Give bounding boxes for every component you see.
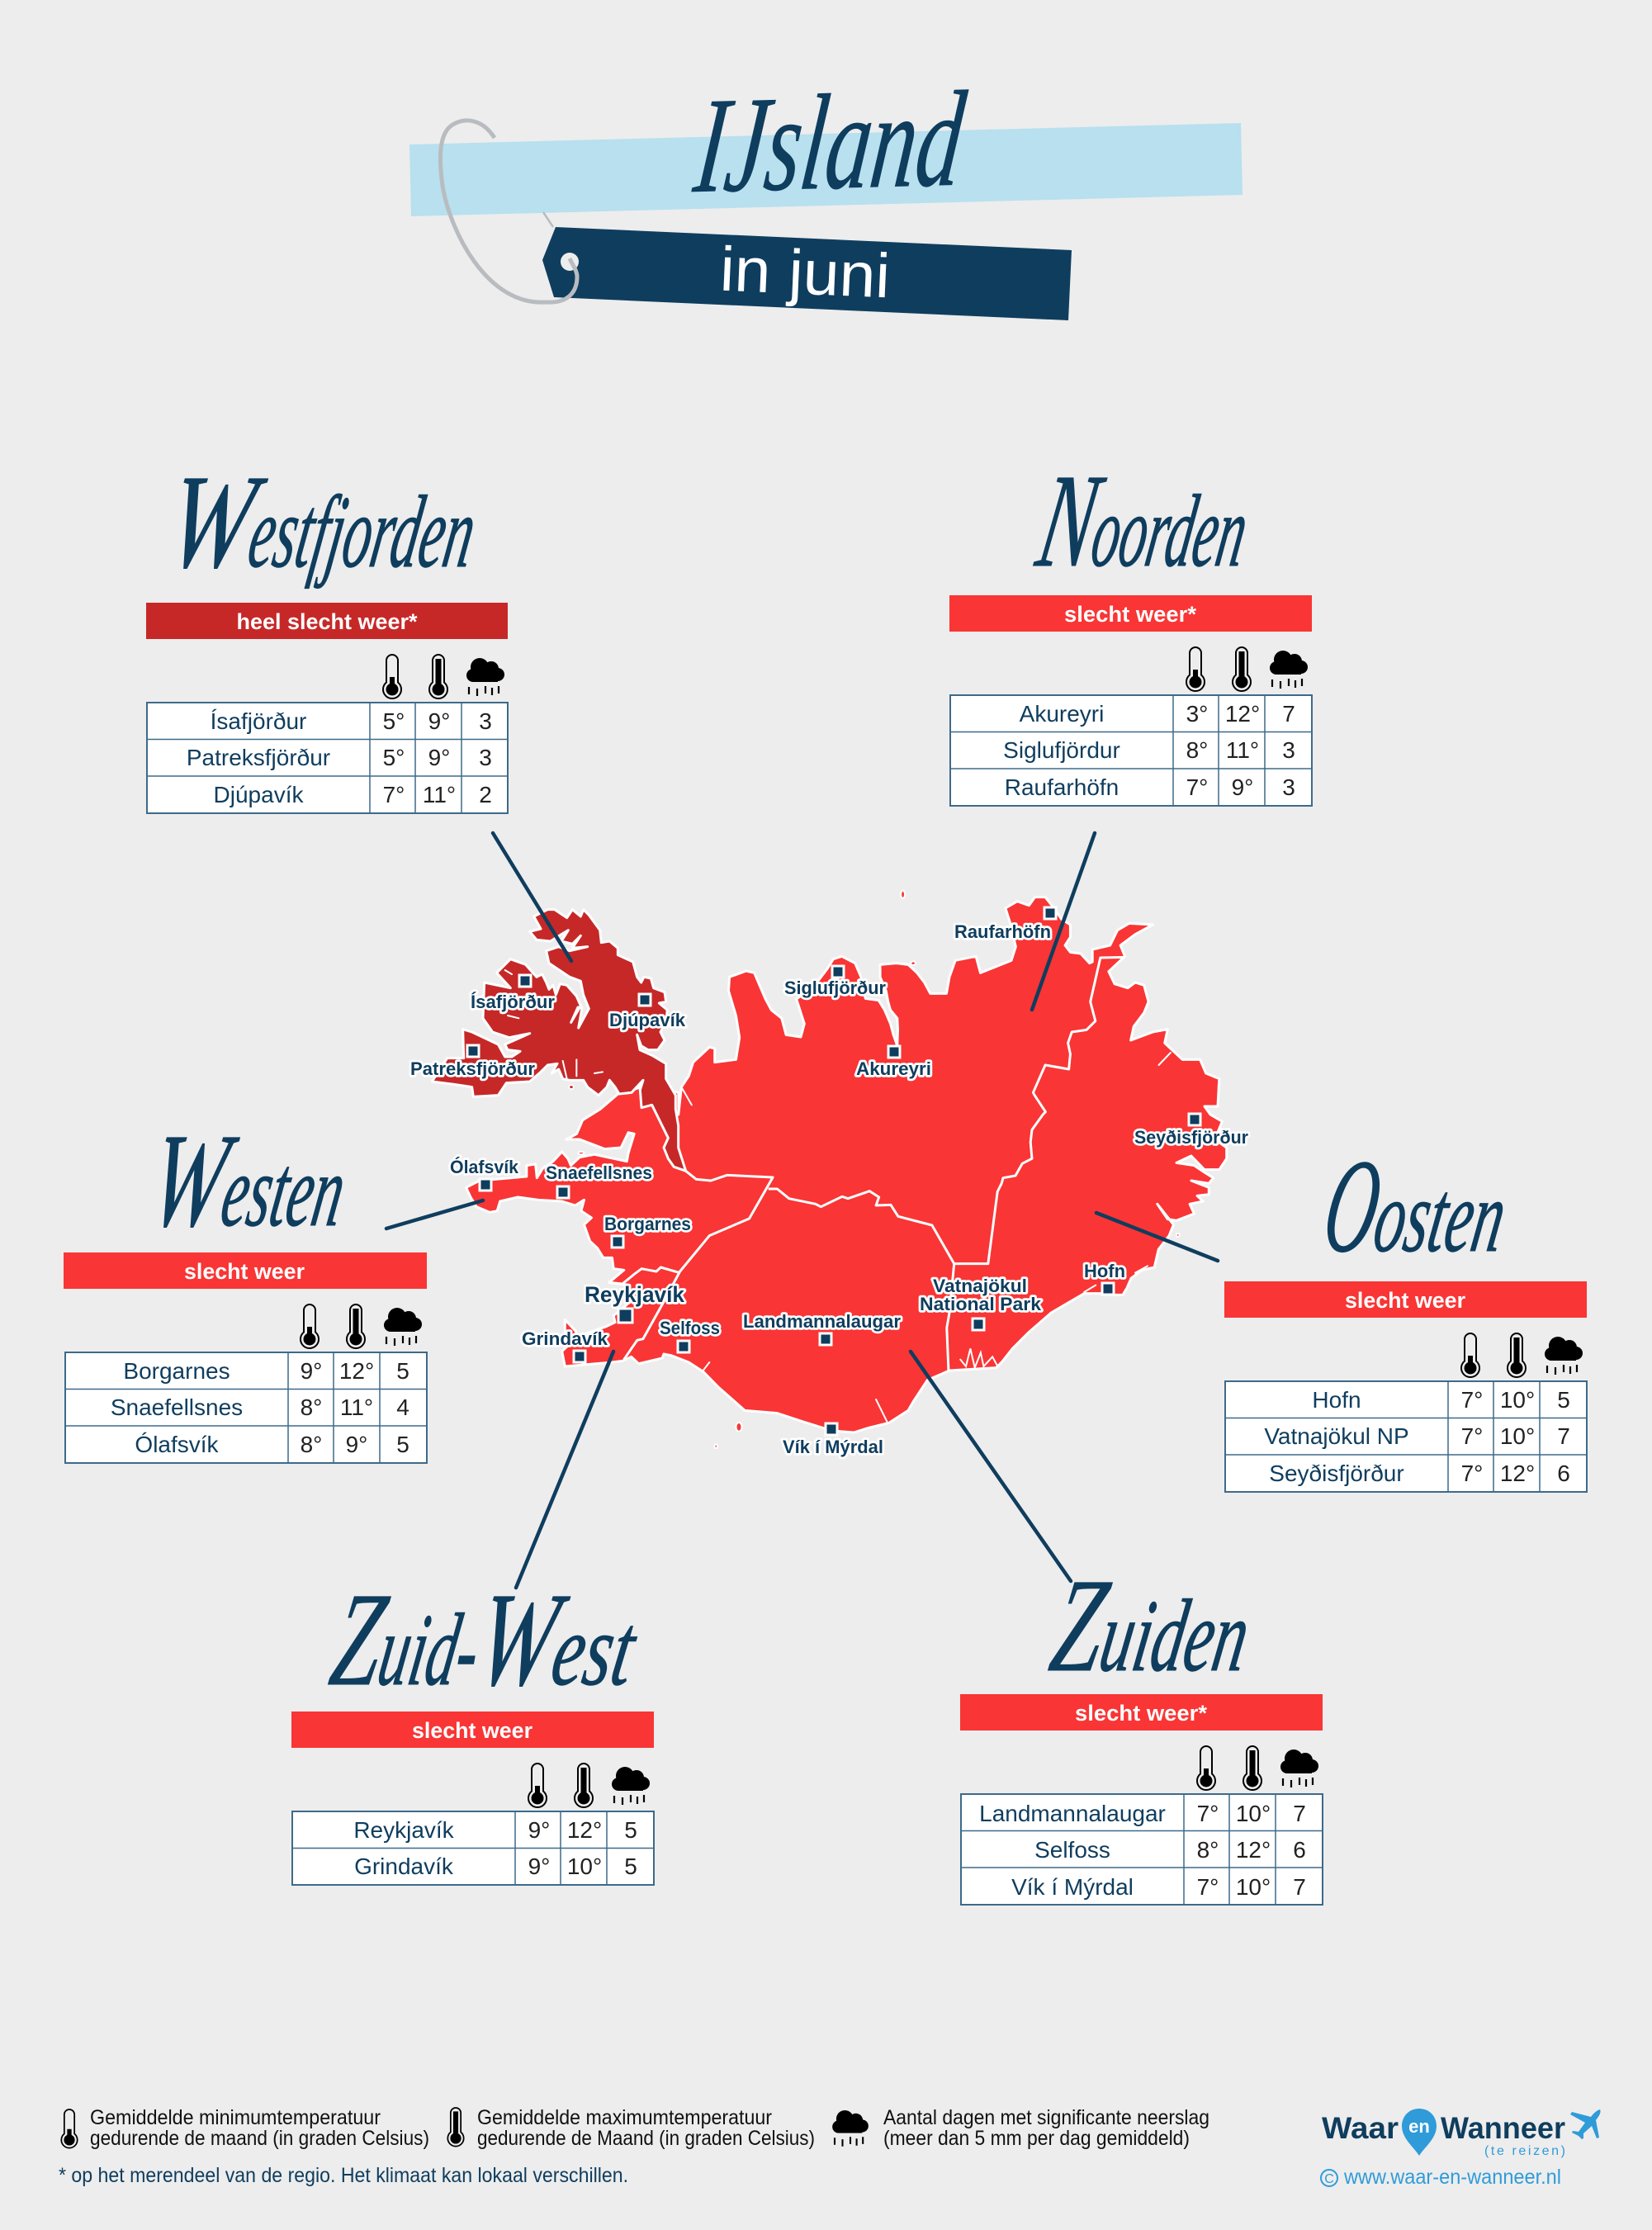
city labels: Hofn — [1084, 1261, 1125, 1281]
legend text: min temperature: gedurende de maand (in graden Celsius) — [90, 2127, 429, 2150]
city labels: Djúpavík — [609, 1010, 686, 1030]
icon: rain — [1270, 651, 1308, 689]
panel body — [64, 1252, 427, 1463]
table: 8° — [301, 1432, 322, 1457]
rating bar — [1224, 1281, 1587, 1318]
panel: Westfjorden — [146, 448, 508, 813]
table: 6 — [1557, 1461, 1570, 1486]
table — [147, 703, 508, 813]
city labels: Vík í Mýrdal — [783, 1437, 883, 1457]
icon: legend max temperature — [447, 2108, 464, 2147]
city labels — [410, 921, 1248, 1457]
icon: min temperature — [301, 1304, 319, 1348]
connector: Zuid-West — [516, 1352, 613, 1588]
panel body: heel slecht weer* — [236, 609, 418, 634]
city labels: Ísafjörður — [471, 992, 555, 1012]
icon: max temperature — [1233, 647, 1251, 691]
heading: Westen — [140, 1107, 358, 1255]
panel body — [949, 595, 1312, 806]
footnote: * op het merendeel van de regio. Het klimaat kan lokaal verschillen. — [59, 2164, 628, 2187]
table: Patreksfjörður — [187, 745, 330, 770]
table: Ísafjörður — [211, 708, 306, 734]
landmass — [466, 897, 1227, 1432]
icon: plane — [1570, 2109, 1601, 2139]
table: 11° — [1226, 737, 1259, 763]
table: 3 — [479, 745, 492, 770]
icon: max temperature — [1508, 1333, 1526, 1377]
table: 7° — [1197, 1874, 1219, 1900]
icon: rain — [466, 658, 504, 696]
icon: max temperature — [347, 1304, 365, 1348]
legend text: max temperature: gedurende de Maand (in graden Celsius) — [477, 2127, 815, 2150]
table: 8° — [1197, 1837, 1219, 1863]
panel: Oosten — [1224, 1133, 1587, 1492]
subtitle: in juni: in juni — [718, 234, 892, 311]
panel body: slecht weer — [412, 1718, 533, 1743]
rating bar — [64, 1252, 427, 1289]
table: 9° — [428, 745, 450, 770]
table: 5 — [396, 1432, 409, 1457]
city labels: Snaefellsnes — [546, 1162, 652, 1183]
table: 10° — [1500, 1387, 1535, 1413]
table: 9° — [528, 1817, 550, 1843]
table: 3 — [1282, 737, 1295, 763]
panel body: slecht weer* — [1075, 1701, 1207, 1726]
icon: min temperature — [528, 1764, 547, 1807]
panel: Zuiden — [960, 1552, 1323, 1905]
table — [950, 695, 1312, 806]
connector: Noorden — [1032, 833, 1095, 1010]
legend text: min temperature: Gemiddelde minimumtemperatuur — [90, 2106, 381, 2129]
rating bar — [146, 603, 508, 639]
table: 9° — [1232, 774, 1253, 800]
city labels: Selfoss — [660, 1318, 720, 1338]
table: 5° — [383, 745, 405, 770]
table: Vík í Mýrdal — [1011, 1874, 1134, 1900]
rating bar — [291, 1712, 654, 1748]
table: Selfoss — [1034, 1837, 1110, 1863]
panel body: slecht weer — [184, 1259, 305, 1284]
connector: Zuiden — [911, 1352, 1071, 1581]
city labels: Patreksfjörður — [410, 1058, 535, 1079]
tag hole — [561, 253, 579, 271]
legend text: rain: (meer dan 5 mm per dag gemiddeld) — [883, 2127, 1190, 2150]
logo text Wanneer: Wanneer — [1441, 2111, 1565, 2145]
table: Borgarnes — [123, 1358, 230, 1384]
table: 10° — [1236, 1801, 1271, 1826]
table: 4 — [396, 1394, 409, 1420]
luggage tag — [542, 227, 1072, 320]
connector lines — [386, 833, 1218, 1588]
title block — [409, 63, 1243, 320]
panel body — [291, 1712, 654, 1885]
title band — [409, 123, 1243, 216]
table: Snaefellsnes — [111, 1394, 243, 1420]
table: 10° — [1500, 1423, 1535, 1449]
table: 8° — [1186, 737, 1208, 763]
panel body — [960, 1694, 1323, 1905]
table: 7° — [1197, 1801, 1219, 1826]
icon: rain — [1280, 1749, 1318, 1787]
icon: rain — [1545, 1337, 1583, 1375]
connector: Westen — [386, 1200, 483, 1229]
tag string — [440, 121, 577, 302]
city labels: Seyðisfjörður — [1134, 1127, 1248, 1148]
icon: min temperature — [1461, 1333, 1479, 1377]
heading: Westfjorden — [158, 448, 489, 596]
table: Landmannalaugar — [979, 1801, 1166, 1826]
icon: min temperature — [1186, 647, 1205, 691]
heading: Zuid-West — [322, 1566, 650, 1714]
table: 7 — [1293, 1874, 1306, 1900]
table: Akureyri — [1020, 701, 1104, 727]
table: 5 — [396, 1358, 409, 1384]
city labels: Grindavík — [522, 1328, 608, 1349]
table — [961, 1794, 1323, 1905]
copyright mark: C — [1324, 2172, 1334, 2186]
table: 11° — [423, 782, 456, 807]
table: Hofn — [1312, 1387, 1361, 1413]
region: Westfjorden — [432, 910, 686, 1171]
table: 3 — [479, 708, 492, 734]
table: Raufarhöfn — [1005, 774, 1119, 800]
table: 9° — [428, 708, 450, 734]
panel body — [1224, 1281, 1587, 1492]
icon: max temperature — [575, 1764, 593, 1807]
panel body: slecht weer — [1345, 1288, 1465, 1313]
rating bar — [960, 1694, 1323, 1730]
icon: legend min temperature — [61, 2109, 78, 2148]
city labels: Akureyri — [856, 1058, 931, 1079]
panel: Zuid-West — [291, 1566, 654, 1885]
table: 3° — [1186, 701, 1208, 727]
table: 7° — [1186, 774, 1208, 800]
logo tagline: (te reizen) — [1484, 2144, 1565, 2158]
table: 9° — [528, 1854, 550, 1879]
legend text: rain: Aantal dagen met significante neerslag — [883, 2106, 1209, 2129]
table — [65, 1352, 427, 1463]
table: 10° — [567, 1854, 602, 1879]
table: 5° — [383, 708, 405, 734]
copyright mark — [1321, 2170, 1337, 2186]
logo: Waar en Wanneer — [1321, 2109, 1601, 2189]
rating bar — [949, 595, 1312, 632]
tag string back — [543, 212, 553, 227]
region boundaries — [609, 957, 1125, 1371]
table: 7° — [1461, 1461, 1483, 1486]
city labels: Reykjavík — [585, 1282, 685, 1307]
city labels: Landmannalaugar — [743, 1311, 901, 1332]
table: Siglufjördur — [1003, 737, 1120, 763]
table: 7 — [1293, 1801, 1306, 1826]
table: Grindavík — [354, 1854, 454, 1879]
legend text: max temperature: Gemiddelde maximumtemperatuur — [477, 2106, 772, 2129]
icon: rain — [612, 1767, 650, 1805]
table: 11° — [340, 1394, 373, 1420]
city labels: Borgarnes — [604, 1214, 691, 1234]
table: 12° — [1236, 1837, 1271, 1863]
panel body — [146, 603, 508, 813]
heading: Oosten — [1314, 1133, 1519, 1281]
table: 2 — [479, 782, 492, 807]
city labels: Ólafsvík — [450, 1157, 519, 1177]
connector: Westfjorden — [493, 833, 571, 961]
table: 12° — [1500, 1461, 1535, 1486]
panel: Noorden — [949, 447, 1312, 806]
map shapes — [466, 891, 1227, 1448]
logo pin — [1402, 2109, 1437, 2156]
table: 12° — [567, 1817, 602, 1843]
table: 5 — [624, 1854, 637, 1879]
table: 7 — [1557, 1423, 1570, 1449]
table: 7° — [1461, 1423, 1483, 1449]
icon: max temperature — [429, 655, 447, 698]
table: 7° — [383, 782, 405, 807]
table: 7° — [1461, 1387, 1483, 1413]
city labels: National Park — [920, 1294, 1042, 1314]
connector: Oosten — [1096, 1213, 1218, 1261]
panel: Westen — [64, 1107, 427, 1463]
table: 5 — [1557, 1387, 1570, 1413]
icon: rain — [384, 1308, 422, 1346]
table: Seyðisfjörður — [1269, 1461, 1404, 1486]
icon: max temperature — [1243, 1746, 1261, 1790]
city labels: Vatnajökul — [933, 1276, 1027, 1296]
table: 5 — [624, 1817, 637, 1843]
website url: www.waar-en-wanneer.nl — [1343, 2166, 1561, 2189]
title: IJsland: IJsland — [688, 63, 972, 221]
table — [1225, 1381, 1587, 1492]
table: 3 — [1282, 774, 1295, 800]
icon: min temperature — [383, 655, 401, 698]
icon: legend rain — [832, 2110, 869, 2147]
logo text en: en — [1408, 2116, 1430, 2137]
heading: Noorden — [1027, 447, 1261, 595]
table: Ólafsvík — [135, 1432, 220, 1457]
table: 7 — [1282, 701, 1295, 727]
table: 9° — [346, 1432, 367, 1457]
table: 6 — [1293, 1837, 1306, 1863]
table: Djúpavík — [214, 782, 304, 807]
table: Reykjavík — [353, 1817, 455, 1843]
islands — [578, 891, 1180, 1448]
city labels: Raufarhöfn — [954, 921, 1051, 942]
heading: Zuiden — [1042, 1552, 1262, 1700]
table: 9° — [301, 1358, 322, 1384]
map of Iceland — [386, 833, 1248, 1588]
table: Vatnajökul NP — [1264, 1423, 1409, 1449]
table: 10° — [1236, 1874, 1271, 1900]
fjord inlets — [681, 1053, 1171, 1422]
table — [292, 1811, 654, 1885]
city markers — [467, 907, 1200, 1435]
city labels: Siglufjörður — [784, 978, 886, 998]
legend — [59, 2106, 1209, 2187]
table: 12° — [339, 1358, 374, 1384]
icon: min temperature — [1197, 1746, 1215, 1790]
panel body: slecht weer* — [1064, 602, 1196, 627]
table: 12° — [1225, 701, 1260, 727]
table: 8° — [301, 1394, 322, 1420]
logo text Waar: Waar — [1322, 2111, 1399, 2145]
